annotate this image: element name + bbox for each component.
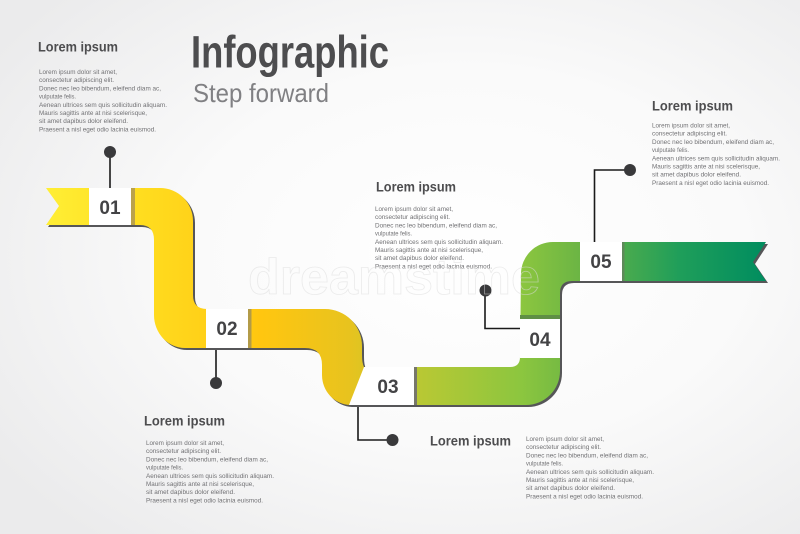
body 5: Lorem ipsum dolor sit amet, — [652, 122, 730, 130]
body 4: Donec nec leo bibendum, eleifend diam ac, — [526, 452, 648, 459]
body 4: Mauris sagittis ante at nisi scelerisque, — [526, 477, 634, 484]
body 3: Donec nec leo bibendum, eleifend diam ac, — [375, 222, 497, 229]
body 2 — [146, 440, 274, 504]
body 5: vulputate felis. — [652, 147, 689, 154]
body 3: vulputate felis. — [375, 231, 412, 238]
body 3 — [375, 206, 503, 270]
connector 01 — [104, 146, 116, 188]
body 1: Praesent a nisl eget odio lacinia euismod. — [39, 126, 156, 133]
body 2: Aenean ultrices sem quis sollicitudin aliquam. — [146, 473, 274, 480]
heading 2: Lorem ipsum — [144, 414, 225, 428]
number 05: 05 — [590, 252, 612, 273]
body 1: sit amet dapibus dolor eleifend. — [39, 118, 128, 125]
body 4: Lorem ipsum dolor sit amet, — [526, 436, 604, 443]
body 1: Aenean ultrices sem quis sollicitudin aliquam. — [39, 102, 167, 109]
body 2: Lorem ipsum dolor sit amet, — [146, 440, 224, 447]
step 04 — [520, 315, 560, 358]
connector 04 — [480, 284, 520, 328]
body 1: Lorem ipsum dolor sit amet, — [39, 69, 117, 76]
body 3: Aenean ultrices sem quis sollicitudin aliquam. — [375, 239, 503, 246]
step 03 — [349, 367, 417, 405]
body 1: vulputate felis. — [39, 94, 76, 101]
heading 3: Lorem ipsum — [376, 180, 456, 194]
body 5 — [652, 122, 780, 187]
body 2: Praesent a nisl eget odio lacinia euismod. — [146, 497, 263, 504]
connector 05 — [594, 164, 636, 242]
body 4: Praesent a nisl eget odio lacinia euismod. — [526, 493, 643, 500]
ribbon — [46, 188, 766, 405]
body 3: Mauris sagittis ante at nisi scelerisque, — [375, 247, 483, 254]
body 5: sit amet dapibus dolor eleifend. — [652, 172, 741, 179]
step 02 — [206, 309, 252, 348]
body 4: sit amet dapibus dolor eleifend. — [526, 485, 615, 492]
body 4 — [526, 436, 654, 500]
body 2: vulputate felis. — [146, 465, 183, 472]
connector 03 — [358, 407, 398, 446]
body 5: Praesent a nisl eget odio lacinia euismod. — [652, 180, 769, 187]
body 5: consectetur adipiscing elit. — [652, 131, 727, 138]
body 3: Lorem ipsum dolor sit amet, — [375, 206, 453, 213]
text block 5 — [652, 98, 780, 187]
subtitle: Step forward — [193, 78, 329, 108]
number 04: 04 — [529, 330, 551, 351]
title: Infographic — [191, 26, 389, 78]
body 5: Mauris sagittis ante at nisi scelerisque, — [652, 164, 760, 170]
body 3: consectetur adipiscing elit. — [375, 214, 450, 221]
body 1: Donec nec leo bibendum, eleifend diam ac, — [39, 85, 161, 92]
connector 02 — [210, 350, 222, 389]
body 4: Aenean ultrices sem quis sollicitudin aliquam. — [526, 469, 654, 476]
body 3: sit amet dapibus dolor eleifend. — [375, 255, 464, 262]
body 1: consectetur adipiscing elit. — [39, 77, 114, 84]
heading 1: Lorem ipsum — [38, 40, 118, 54]
text block 3 — [375, 180, 503, 270]
body 5: Donec nec leo bibendum, eleifend diam ac, — [652, 139, 774, 146]
watermark: dreamstime — [248, 249, 540, 305]
body 3: Praesent a nisl eget odio lacinia euismod. — [375, 263, 492, 270]
body 2: Mauris sagittis ante at nisi scelerisque, — [146, 481, 254, 488]
text block 4 — [430, 434, 654, 500]
body 1: Mauris sagittis ante at nisi scelerisque, — [39, 110, 147, 117]
body 2: sit amet dapibus dolor eleifend. — [146, 489, 235, 496]
step 05 — [580, 242, 624, 281]
body 1 — [39, 69, 167, 133]
body 5: Aenean ultrices sem quis sollicitudin aliquam. — [652, 155, 780, 162]
number 03: 03 — [377, 377, 399, 398]
body 4: vulputate felis. — [526, 461, 563, 468]
body 4: consectetur adipiscing elit. — [526, 444, 601, 451]
step 01 — [89, 188, 135, 225]
body 2: consectetur adipiscing elit. — [146, 448, 221, 455]
text block 2 — [144, 414, 274, 504]
text block 1 — [38, 40, 167, 133]
number 02: 02 — [216, 319, 238, 340]
body 2: Donec nec leo bibendum, eleifend diam ac, — [146, 456, 268, 463]
heading 4: Lorem ipsum — [430, 434, 511, 448]
ribbon shadow — [48, 190, 768, 407]
heading 5: Lorem ipsum — [652, 98, 733, 114]
number 01: 01 — [99, 198, 121, 219]
